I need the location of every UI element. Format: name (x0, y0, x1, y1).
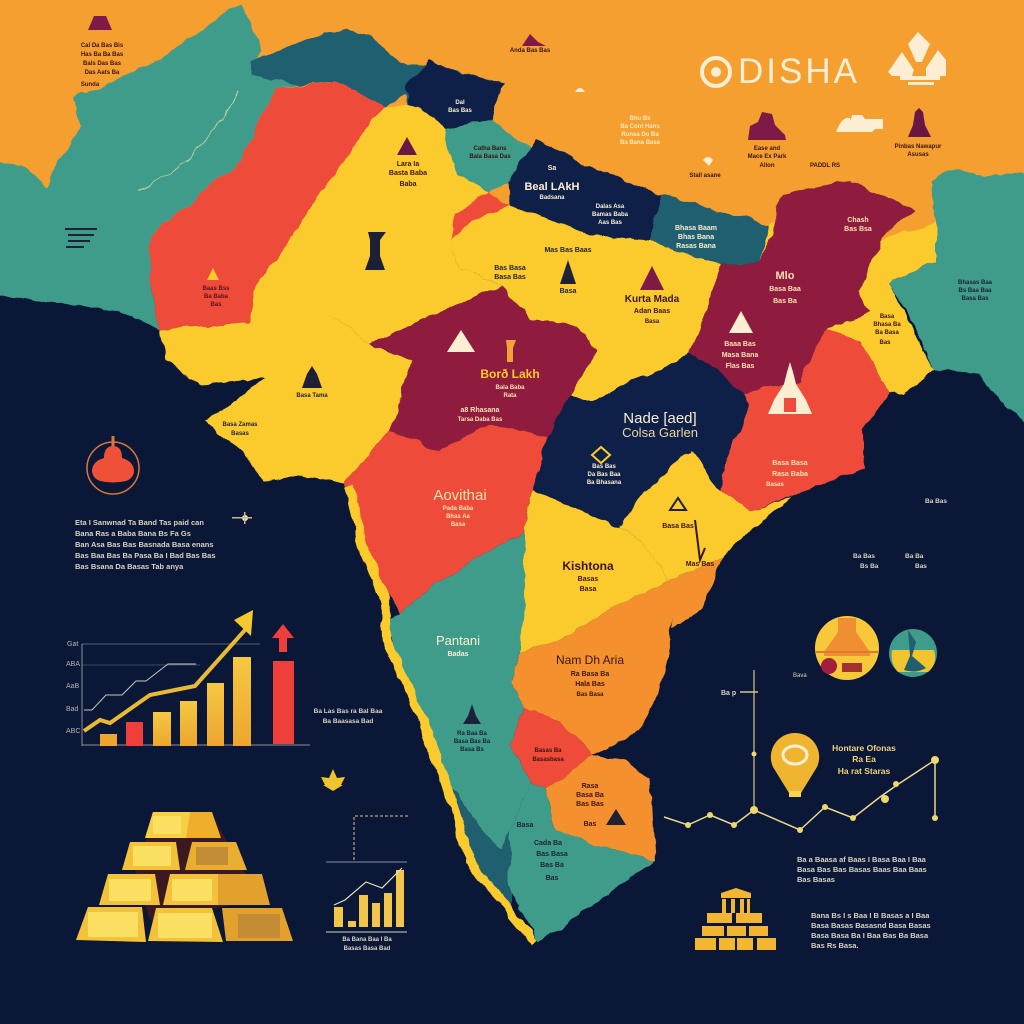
text block: upper right sea note: Ba Ba (905, 553, 924, 560)
top captions: Asusas (907, 152, 929, 158)
label: navy state details: Aas Bas (598, 220, 622, 226)
label: navy state details (592, 204, 629, 226)
region: coastal yellow (620, 450, 790, 580)
top captions: Runsa Do Ba (621, 132, 659, 138)
top captions: Bas Bas (448, 108, 472, 114)
label: east maroon region: Mlo (776, 270, 795, 282)
label: Gujarat region: Basa Zamas (222, 422, 258, 428)
label: Aovithai western red region: Bhas Aa (446, 514, 471, 520)
label: east maroon region: Bas Ba (773, 298, 797, 305)
label: Bengal red with temple: Rasa Baba (772, 471, 808, 478)
label: central navy state: Ba Bhasana (587, 480, 622, 486)
label: Kanta region: Basa (645, 319, 660, 325)
label: Pantani teal region: Pantani (436, 633, 480, 648)
text block: upper right sea note: Bs Ba (860, 563, 879, 570)
top captions: Stall asane (689, 173, 721, 179)
text block: gold pin caption: Ha rat Staras (838, 766, 890, 776)
label: southern orange region: Bas Bas (576, 801, 604, 808)
region: dark teal east (650, 195, 770, 265)
label: Kishtona region: Basas (578, 576, 598, 583)
label: eastern teal details: Bs Baa Baa (958, 288, 992, 294)
label: north yellow region: Baba (399, 181, 417, 188)
icon: coin circle (815, 616, 879, 680)
label: west coast icons (454, 704, 491, 753)
label: southern orange region: Rasa (582, 783, 598, 790)
label: Aovithai western red region: Pada Baba (443, 506, 474, 512)
icon: sparkle (232, 512, 252, 524)
label: southern red region: Basasbasa (532, 757, 564, 763)
label: central navy state (587, 410, 698, 486)
label: southern teal region: Bas (546, 875, 559, 882)
label: Gujarat region (222, 366, 328, 437)
region: top navy (508, 140, 662, 240)
region: northern dark teal (250, 28, 505, 130)
label: north yellow region (389, 137, 427, 188)
label: southern red region: Basas Ba (534, 748, 562, 754)
label: Bengal Lakh: Sa (548, 165, 556, 172)
label: plains north: Mas Bas Baas (544, 247, 592, 254)
small top icons (88, 16, 713, 166)
text block: left description: Bas Baa Bas Ba Pasa Ba I Bad Bas Bas (75, 551, 216, 560)
label: central maroon region (447, 330, 540, 423)
region: small orange (665, 558, 722, 628)
top captions (81, 43, 942, 179)
label: east yellow details: Bas (879, 340, 891, 346)
label: southern orange region: Bas (584, 821, 597, 828)
label: central navy state: Colsa Garlen (622, 425, 698, 440)
title: Odisha logo: DISHA (738, 52, 860, 91)
label: central maroon region: a8 Rhasana (461, 407, 500, 414)
label: eastern teal details: Bhasas Baa (958, 280, 993, 286)
top captions: Cal Da Bas Bis (81, 43, 124, 49)
region: Karnataka yellow (520, 490, 668, 652)
region: central navy (533, 352, 750, 528)
label: southern teal region: Bas Ba (540, 862, 564, 869)
label: central maroon region: Rata (503, 393, 517, 399)
label: Pantani teal region: Badas (447, 651, 469, 658)
label: east yellow details: Bhasa Ba (873, 322, 901, 328)
label: east yellow details (873, 314, 901, 346)
top captions: Sunda (81, 82, 100, 88)
label: Kishtona region: Kishtona (562, 559, 614, 573)
label: east maroon region: Masa Bana (722, 352, 758, 359)
bar row 4 (76, 907, 293, 942)
label: Aovithai western red region: Aovithai (433, 487, 487, 504)
text block: gold pin caption (832, 743, 896, 776)
top captions: Dal (455, 100, 465, 106)
label: navy state details: Bamas Baba (592, 212, 629, 218)
label: Kishtona region: Basa (580, 586, 596, 593)
bar row 2 (122, 842, 247, 870)
icon: purple shrine (908, 108, 931, 137)
label: Pantani teal region (436, 633, 480, 658)
bar chart: gold growth: Gat (67, 641, 78, 648)
region: northern plains yellow (450, 205, 722, 402)
top captions: Bhu Bs (630, 116, 651, 122)
label: north-west red region: Bas (210, 302, 222, 308)
label: east yellow details: Basa (880, 314, 895, 320)
label: Gujarat region: Basa Tama (296, 393, 328, 399)
label: Bengal Lakh: Badsana (539, 195, 565, 201)
label: Naam orange region (556, 653, 624, 698)
text block: left description: Bas Bsana Da Basas Tab anya (75, 562, 184, 571)
region: south-west dark teal (445, 780, 510, 910)
top captions: Allon (760, 163, 775, 169)
icon: gold leaf (321, 769, 345, 791)
region: southern orange (545, 755, 655, 860)
internal border lines (140, 92, 240, 190)
small bar chart: Ba Bana Baa I Ba (342, 937, 392, 943)
icon: gold temple on bars (695, 888, 776, 950)
label: southern teal region: Cada Ba (534, 840, 562, 847)
caption: chart note: Ba Baasasa Bad (323, 718, 373, 725)
label: east maroon region: Chash (847, 217, 869, 224)
region: western teal country (0, 4, 300, 330)
region: southern teal (510, 782, 655, 942)
label: Kishtona region (562, 559, 614, 593)
text block: upper right sea note (853, 498, 947, 570)
label: Bengal red with temple (766, 362, 812, 488)
top captions: Ease and (754, 146, 781, 152)
top captions: Bals Das Bas (83, 61, 122, 67)
label: Aovithai western red region: Basa (451, 522, 466, 528)
label: central maroon region: Borð Lakh (480, 367, 540, 381)
text block: right description 1: Ba a Baasa af Baas I Basa Baa I Baa (797, 855, 927, 864)
region: north navy (405, 60, 505, 130)
label: coastal yellow region (662, 498, 714, 568)
region: east maroon (690, 180, 915, 392)
region: southern red (510, 708, 592, 790)
text block: right description 2: Basa Basa Ba I Baa Bas Ba Basa (811, 931, 929, 940)
caption: chart note (314, 708, 383, 725)
label: central maroon region: Tarsa Daba Bas (458, 417, 503, 423)
left teal caption lines (65, 228, 97, 248)
bar chart: gold growth: AaB (66, 683, 80, 690)
top captions: Bala Basa Das (469, 154, 511, 160)
label: central navy state: Bas Bas (592, 464, 616, 470)
label: dark-teal state details (675, 225, 717, 250)
label: Bengal red with temple: Basa Basa (772, 460, 808, 467)
label: navy state details: Dalas Asa (596, 204, 625, 210)
label: central navy state: Nade [aed] (623, 410, 697, 427)
icon: white temple (888, 32, 946, 85)
top captions: Ba Cont Hans (620, 124, 660, 130)
label: Naam orange region: Bas Basa (576, 692, 604, 698)
text block: left description: Eta I Sanwnad Ta Band Tas paid can (75, 518, 204, 527)
label: central navy state: Da Bas Baa (587, 472, 621, 478)
label: central maroon region: Bala Baba (495, 385, 525, 391)
region: central maroon (370, 285, 597, 450)
bar chart: gold growth: ABC (66, 728, 80, 735)
label: coastal yellow region: Mas Bas (686, 561, 714, 568)
top captions: PADDL RS (810, 163, 840, 169)
text block: right description 1: Basa Bas Bas Basas Baas Baa Baas (797, 865, 927, 874)
top captions: Anda Bas Bas (510, 48, 551, 54)
label: north-west red region (202, 268, 230, 308)
region: eastern teal country (890, 170, 1024, 440)
text block: right description 1 (797, 855, 927, 884)
bar chart: gold growth (66, 610, 310, 746)
top captions: Pinbas Nawapur (895, 144, 942, 150)
label: Kanta region (625, 266, 680, 325)
region: small teal (445, 120, 530, 192)
bar row 3 (99, 874, 270, 905)
text block: right description 2 (811, 911, 931, 950)
top captions: Has Ba Ba Bas (81, 52, 124, 58)
bar chart: gold growth: Bad (66, 706, 79, 713)
label: southern teal region: Bas Basa (536, 851, 568, 858)
top captions: Das Aats Ba (85, 70, 120, 76)
label: eastern teal details: Basa Bas (961, 296, 989, 302)
label: east maroon region: Flas Bas (726, 363, 755, 370)
region: large orange (510, 580, 672, 755)
text block: right description 2: Bas Rs Basa. (811, 941, 859, 950)
text block: upper right sea note: Ba Bas (925, 498, 947, 505)
label: east maroon region (722, 217, 872, 370)
icon: dark figure (365, 232, 386, 270)
label: southern orange region (576, 783, 626, 828)
right bead line chart: Ba p (721, 690, 736, 697)
text block: right description 2: Basa Basas Basasnd Basa Basas (811, 921, 931, 930)
label: west coast icons: Basa Bs (460, 747, 484, 753)
label: east maroon region: Baaa Bas (724, 341, 756, 348)
region: small red (450, 192, 510, 268)
label: north yellow region: Basta Baba (389, 170, 427, 177)
right bead line chart (664, 670, 939, 833)
caption: chart note: Ba Las Bas ra Bal Baa (314, 708, 383, 715)
region: north-west red (150, 80, 385, 330)
label: dark-teal state details: Bhasa Baam (675, 225, 717, 232)
region: north yellow (258, 105, 508, 345)
text block: gold pin caption: Ra Ea (852, 754, 876, 764)
top captions: Mace Ex Park (748, 154, 787, 160)
label: north-west red region: Ba Baba (204, 294, 229, 300)
label: Bengal red with temple: Basas (766, 482, 784, 488)
small bar chart (326, 816, 408, 952)
label: dark-teal state details: Bhas Bana (678, 234, 714, 241)
icon: gold pin bulb (771, 733, 819, 797)
label: Bengal Lakh (524, 165, 580, 201)
bar row 1 (145, 812, 221, 838)
label: plains north: Basa Bas (494, 274, 526, 281)
icon: maroon monument (748, 112, 786, 140)
label: east maroon region: Basa Baa (769, 286, 801, 293)
gold bars pile (76, 812, 293, 942)
label: Gujarat region: Basas (231, 431, 250, 437)
label: east yellow details: Ba Basa (875, 330, 900, 336)
label: plains north (494, 247, 592, 295)
label: Naam orange region: Nam Dh Aria (556, 653, 624, 667)
text block: left description (75, 518, 216, 571)
icon: red emblem circle (87, 436, 139, 494)
region: Gujarat yellow (160, 282, 412, 485)
label: Aovithai western red region (433, 487, 487, 528)
label: west coast icons: Ra Baa Ba (457, 731, 488, 737)
label: Kanta region: Kurta Mada (625, 294, 680, 305)
label: north-west red region: Baas Bss (202, 286, 230, 292)
label: southern orange region: Basa Ba (576, 792, 604, 799)
label: Kanta region: Adan Baas (634, 308, 670, 315)
label: east maroon region: Bas Bsa (844, 226, 872, 233)
label: coastal yellow region: Basa Bas (662, 523, 694, 530)
region: east yellow (760, 215, 936, 395)
caption: small map note: Bava (793, 673, 807, 679)
label: Bengal Lakh: Beal LAkH (524, 181, 580, 193)
label: Naam orange region: Ra Basa Ba (571, 671, 609, 678)
top captions: Ba Bana Basa (620, 140, 661, 146)
state labels and icons (202, 137, 993, 882)
text block: right description 1: Bas Basas (797, 875, 835, 884)
label: southern teal region (517, 822, 568, 882)
label: plains north: Basa (560, 288, 576, 295)
region: Bengal red (720, 330, 890, 512)
region: west-coast teal (385, 530, 530, 850)
icon: white building (836, 115, 883, 132)
text block: gold pin caption: Hontare Ofonas (832, 743, 896, 753)
label: southern teal region: Basa (517, 822, 533, 829)
top captions: Catha Bans (473, 146, 507, 152)
label: eastern teal details (958, 280, 993, 302)
icon: teal circle (889, 629, 937, 677)
text block: left description: Bana Ras a Baba Bana Bs Fa Gs (75, 529, 191, 538)
bar chart: gold growth: ABA (66, 661, 80, 668)
label: plains north: Bas Basa (494, 265, 526, 272)
label: north yellow region: Lara Ia (397, 161, 419, 168)
text block: upper right sea note: Bas (915, 563, 927, 570)
label: Naam orange region: Hala Bas (575, 681, 605, 688)
label: southern red region (532, 748, 564, 763)
coast outline (349, 487, 535, 942)
region: western red (345, 425, 547, 612)
small bar chart: Basas Basa Bad (344, 946, 391, 952)
text block: upper right sea note: Ba Bas (853, 553, 875, 560)
text block: left description: Ban Asa Bas Bas Basnada Basa enans (75, 540, 214, 549)
text block: right description 2: Bana Bs I s Baa I B Basas a I Baa (811, 911, 930, 920)
label: dark-teal state details: Rasas Bana (676, 243, 716, 250)
label: west coast icons: Basa Bas Ba (454, 739, 491, 745)
